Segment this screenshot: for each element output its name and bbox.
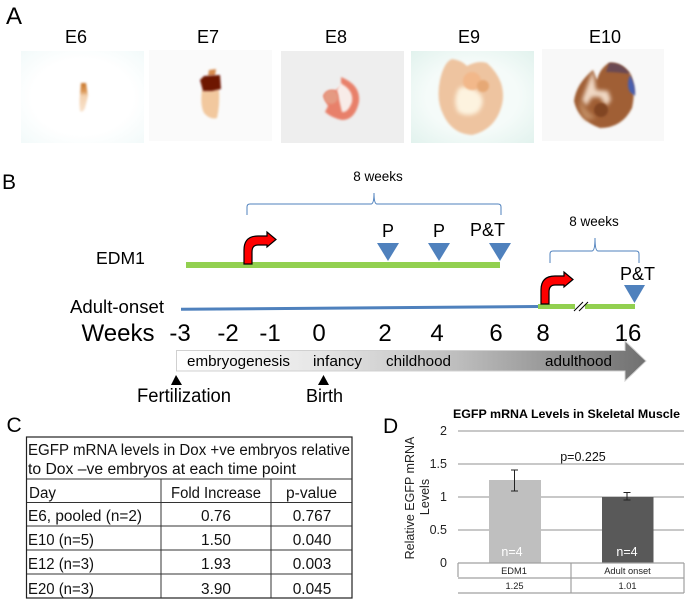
labels: life stages: infancy [313,353,363,370]
data table: EDM1 [501,566,527,576]
table: EGFP fold increase: 0.045 [293,581,331,598]
axis: weeks labels: -1 [259,320,281,347]
photo: E6 embryo [21,51,144,143]
bar: EDM1 green timeline [186,262,500,268]
marker: P&T week 16: P&T [620,264,655,284]
chart title: EGFP mRNA Levels in Skeletal Muscle [453,409,680,421]
y axis title: Relative EGFP mRNA [403,436,417,559]
table: EGFP fold increase: Fold Increase [171,485,261,502]
label: Adult-onset: Adult-onset [70,297,164,317]
label E8: E8 [325,27,347,47]
axis: weeks labels: -3 [169,320,191,347]
axis: weeks labels: 8 [536,320,550,347]
data table: Adult onset [604,566,651,576]
y axis tick labels: 0.5 [430,523,447,537]
table: EGFP fold increase: p-value [286,485,337,502]
label: 8 weeks EDM1: 8 weeks [353,169,403,184]
table: EGFP fold increase: 1.93 [201,556,231,573]
panel letter D: D [383,415,398,438]
axis: weeks labels: 16 [615,320,641,347]
table: EGFP fold increase [26,437,352,598]
label E7: E7 [197,27,219,47]
labels: life stages [187,353,612,370]
bar: EDM1 [489,480,541,563]
marker: P&T week 16 [620,264,655,303]
gridlines [458,431,684,530]
axis: weeks labels: Weeks [82,320,154,347]
labels: life stages: adulthood [545,353,612,370]
data table [458,563,684,593]
panel letter A: A [6,3,22,30]
photo: E10 embryo [542,49,664,141]
marker: Birth [306,375,343,406]
table: EGFP fold increase: 0.003 [293,556,331,573]
panel: D bar chart [383,409,684,593]
table: EGFP fold increase: 0.767 [293,508,331,525]
error bar: Adult onset [624,492,630,500]
bar: Adult-onset green segments [538,304,635,309]
annotation: p-value: p=0.225 [560,450,606,464]
label E9: E9 [458,27,480,47]
axis: weeks labels: 0 [312,320,326,347]
panel letter C: C [6,414,22,437]
labels: life stages: embryogenesis [187,353,290,370]
bracket: adult 8 weeks [550,238,639,263]
marker: P week 4 [428,221,450,261]
y axis tick labels [430,424,447,570]
table: EGFP fold increase: E10 (n=5) [28,532,94,549]
table: EGFP fold increase: 3.90 [201,581,231,598]
marker: Fertilization [137,375,231,407]
marker: P week 4: P [433,221,445,241]
data table: 1.01 [618,581,637,591]
bar: Adult onset: n=4 [616,545,638,559]
table: EGFP fold increase: to Dox –ve embryos at each time point [28,461,297,478]
table: EGFP fold increase: 1.50 [201,532,231,549]
table: EGFP fold increase: Day [29,485,56,502]
bracket: EDM1 8 weeks [247,193,501,215]
axis: weeks labels: 2 [378,320,392,347]
y axis tick labels: 2 [440,424,447,438]
break mark [574,302,588,311]
marker: P&T week 6: P&T [470,220,505,240]
y axis title [403,436,432,559]
panel letter B: B [2,171,16,194]
table: EGFP fold increase: EGFP mRNA levels in Dox +ve embryos relative [28,442,350,459]
table: EGFP fold increase: E12 (n=3) [28,556,94,573]
label: EDM1: EDM1 [96,248,145,268]
data table: 1.25 [505,581,524,591]
table: EGFP fold increase: 0.76 [201,508,231,525]
axis: weeks labels [82,320,641,347]
table: EGFP fold increase: E6, pooled (n=2) [28,508,142,525]
y axis tick labels: 0 [440,556,447,570]
line: Adult-onset blue timeline [181,306,538,309]
label E6: E6 [65,27,87,47]
marker: P week 2: P [382,221,394,241]
photo: E8 embryo [281,51,404,143]
axis: weeks labels: 6 [489,320,503,347]
error bar: EDM1 [511,470,518,491]
marker: P&T week 6 [470,220,511,261]
bar: EDM1: n=4 [501,545,523,559]
label: 8 weeks adult: 8 weeks [569,214,619,229]
y axis tick labels: 1 [440,490,447,504]
panel: A embryo images [6,3,664,143]
label E10: E10 [589,27,621,47]
y axis tick labels: 1.5 [430,457,447,471]
arrow: adult-onset red promoter [541,272,573,304]
bar: Adult onset [602,497,654,563]
axis: weeks labels: 4 [430,320,444,347]
arrow: EDM1 red promoter [244,232,276,264]
photo: E9 embryo [411,51,534,143]
labels: life stages: childhood [386,353,451,370]
table: EGFP fold increase: E20 (n=3) [28,581,94,598]
y axis title: Levels [418,479,432,515]
table: EGFP fold increase: 0.040 [293,532,331,549]
photo: E7 embryo [149,50,272,141]
arrow: life stages gradient [176,341,646,381]
axis: weeks labels: -2 [217,320,239,347]
panel: C table [6,414,352,598]
marker: P week 2 [377,221,399,261]
marker: Fertilization: Fertilization [137,386,231,407]
panel: B timeline [2,169,655,407]
marker: Birth: Birth [306,385,343,406]
